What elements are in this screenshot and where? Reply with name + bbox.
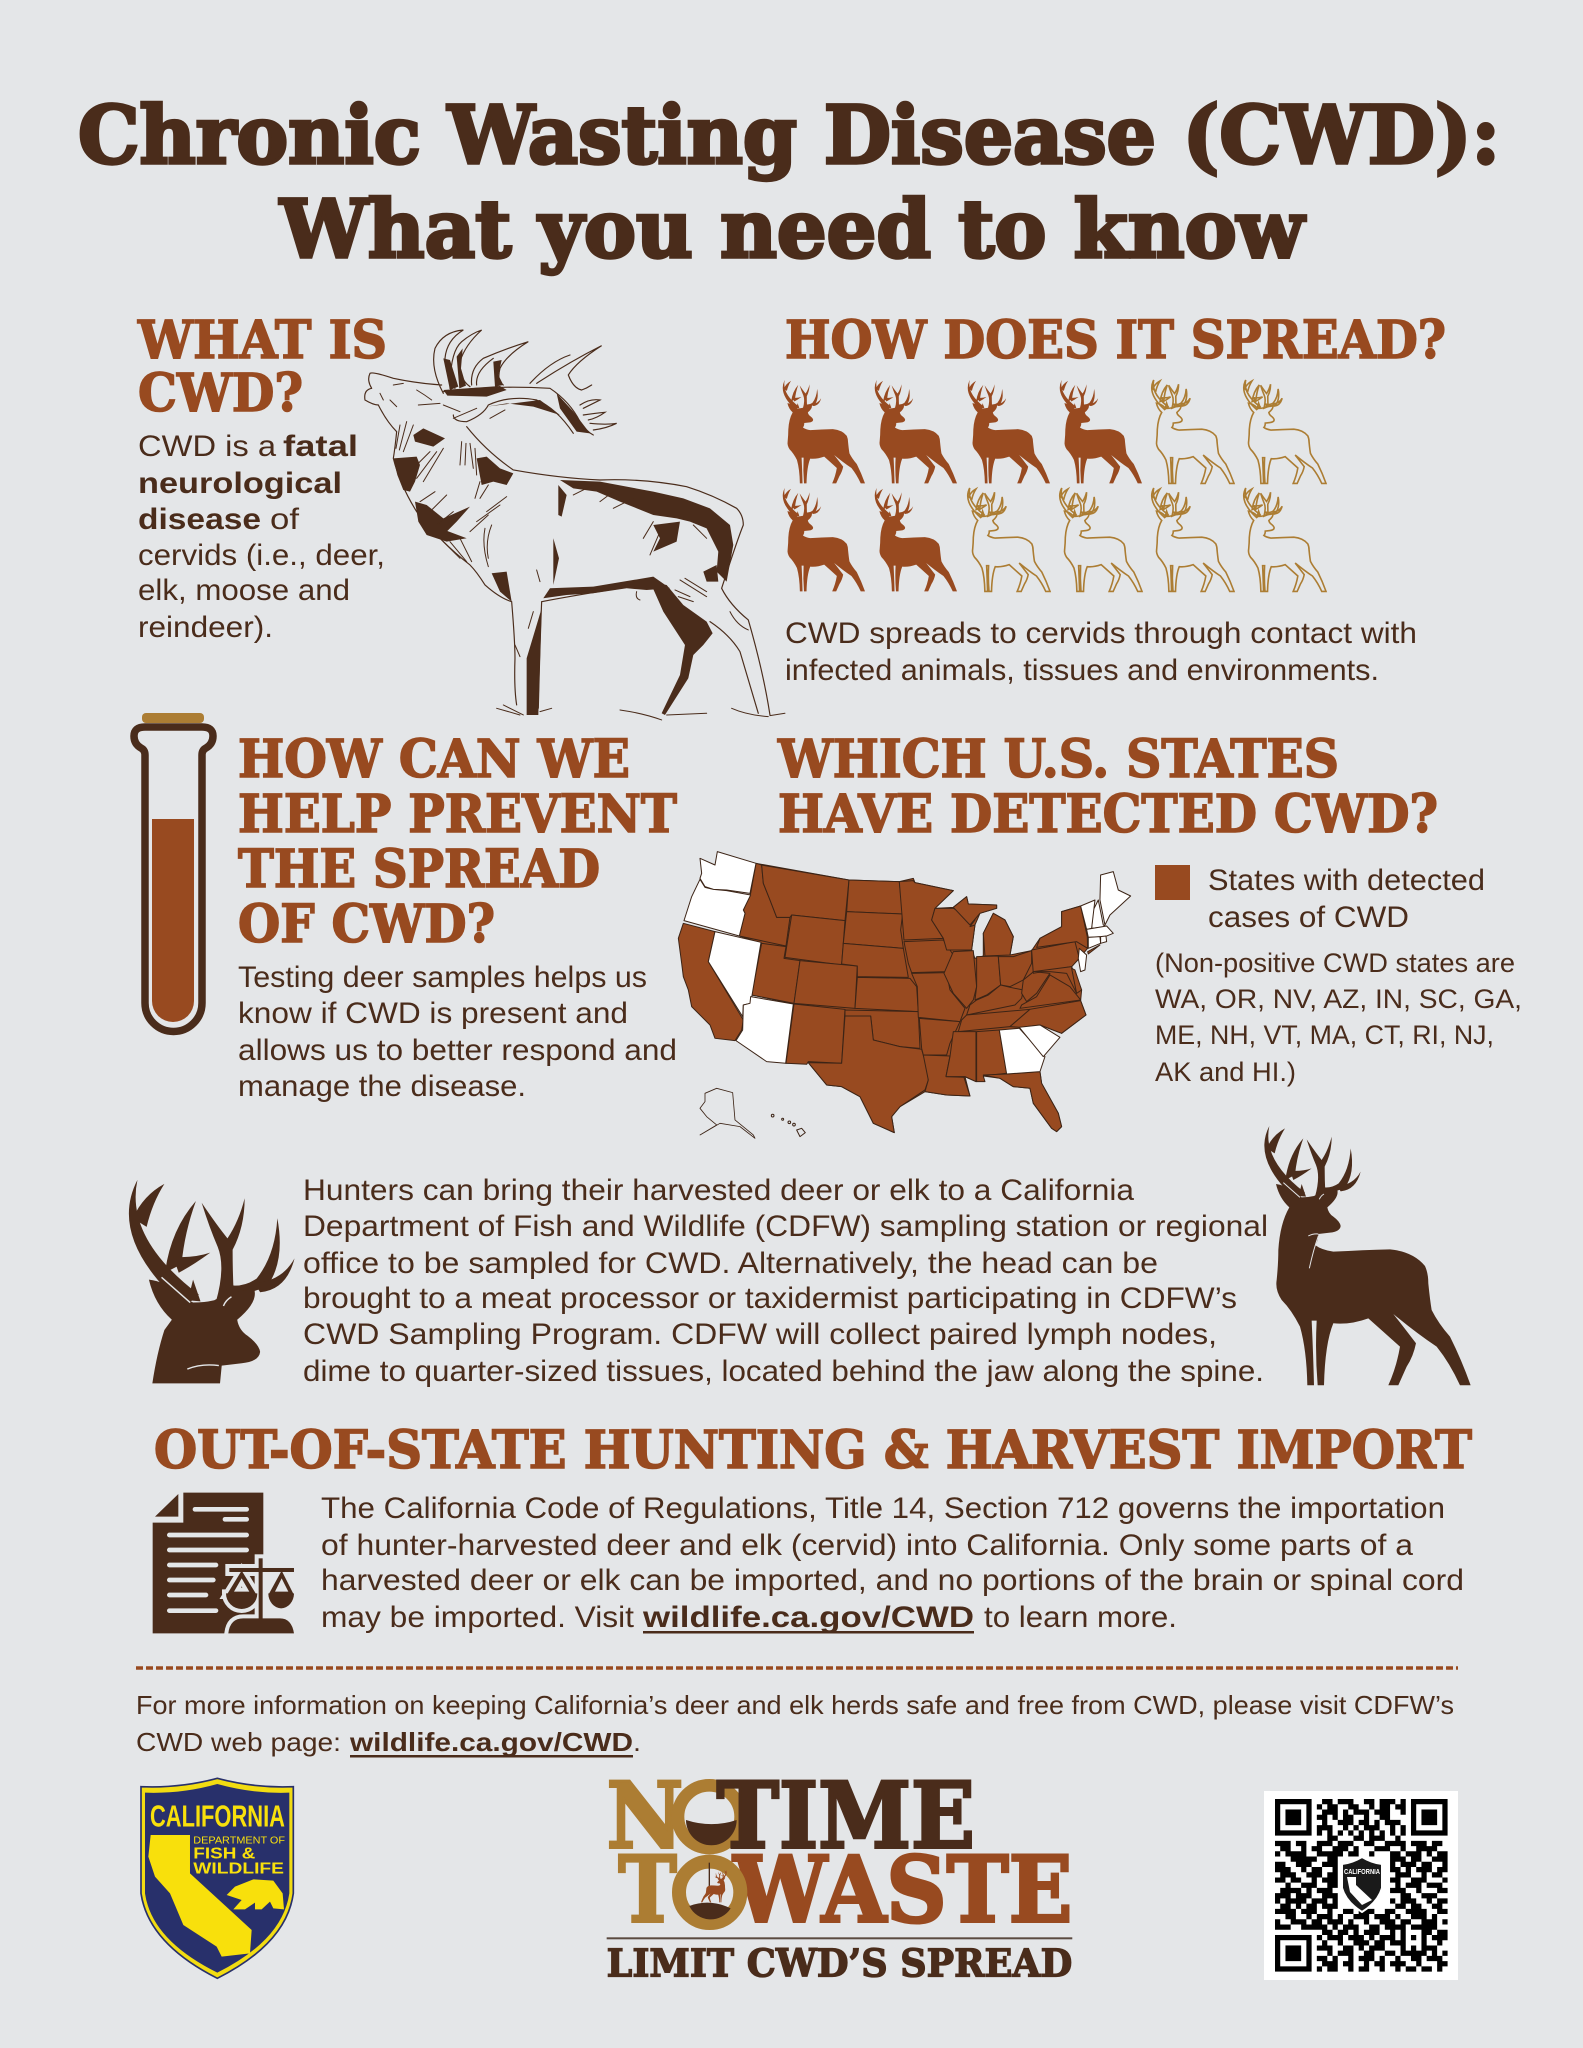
text: CWD definition: elk, moose and	[138, 574, 350, 607]
text: testing samples: know if CWD is present and	[238, 997, 628, 1030]
title: What you need to know	[279, 182, 1306, 276]
heading: out-of-state hunting and harvest import: OUT-OF-STATE HUNTING & HARVEST IMPORT	[154, 1420, 1472, 1481]
text: regulations: The California Code of Regulations, Title 14, Section 712 governs the importation	[321, 1492, 1445, 1525]
heading: how can we help prevent the spread: HELP PREVENT	[238, 784, 677, 845]
text: regulations	[321, 1492, 1464, 1634]
logo: No Time To Waste: WASTE	[732, 1838, 1072, 1944]
text: CWD definition: cervids (i.e., deer,	[138, 539, 385, 572]
text: testing samples: manage the disease.	[238, 1070, 526, 1103]
text: non-positive states: (Non-positive CWD states are	[1155, 948, 1515, 978]
icon: deer head	[129, 1180, 295, 1383]
logo: CDFW shield	[141, 1778, 293, 1978]
heading: which U.S. states: WHICH U.S. STATES	[777, 729, 1339, 790]
text: more information: wildlife.ca.gov/CWD	[349, 1727, 633, 1757]
map: US states with detected CWD	[678, 852, 1131, 1138]
heading: which U.S. states	[777, 729, 1438, 845]
panel: which states	[678, 729, 1522, 1138]
logo: No Time To Waste: TIME	[717, 1763, 975, 1869]
text: CWD definition: CWD is a	[138, 430, 276, 463]
heading: how can we help prevent the spread: THE SPREAD	[238, 839, 600, 900]
logo: CDFW shield: DEPARTMENT OF	[193, 1835, 285, 1846]
text: more information: For more information on keeping California’s deer and elk herds safe and free from CWD, please visit CDFW’s	[136, 1690, 1454, 1720]
text: CWD definition: disease	[138, 503, 261, 536]
text: regulations: harvested deer or elk can be imported, and no portions of the brain or spinal cord	[321, 1564, 1464, 1597]
icon: standing deer	[1264, 1126, 1471, 1385]
logo: CDFW shield: CALIFORNIA	[150, 1800, 285, 1834]
logo: No Time To Waste	[607, 1763, 1072, 1986]
logo: No Time To Waste: LIMIT CWD’S SPREAD	[607, 1941, 1072, 1986]
text: regulations: wildlife.ca.gov/CWD	[642, 1601, 974, 1634]
text: non-positive states: WA, OR, NV, AZ, IN, SC, GA,	[1155, 984, 1522, 1014]
text: CWD definition: of	[270, 503, 300, 536]
heading: how can we help prevent the spread: OF CWD?	[238, 894, 495, 955]
panel: hunter sampling	[129, 1126, 1471, 1388]
text: hunters sampling	[303, 1174, 1268, 1388]
QR code	[1264, 1791, 1458, 1980]
text: how CWD spreads	[785, 617, 1417, 687]
text: hunters sampling: dime to quarter-sized tissues, located behind the jaw along the spine.	[303, 1355, 1264, 1388]
text: more information: CWD web page:	[136, 1727, 341, 1757]
logo: No Time To Waste: T	[618, 1838, 677, 1944]
text: non-positive states: ME, NH, VT, MA, CT, RI, NJ,	[1155, 1020, 1494, 1050]
text: CWD definition: neurological	[138, 467, 342, 500]
heading: what is CWD: CWD?	[138, 363, 303, 424]
title: Chronic Wasting Disease (CWD):	[78, 88, 1500, 182]
text: hunters sampling: office to be sampled for CWD. Alternatively, the head can be	[303, 1247, 1158, 1280]
text: hunters sampling: brought to a meat processor or taxidermist participating in CDFW’s	[303, 1282, 1237, 1315]
logo: CDFW shield: WILDLIFE	[193, 1860, 284, 1877]
legend: States with detected	[1208, 864, 1485, 897]
heading: how can we help prevent the spread: HOW CAN WE	[238, 729, 630, 790]
text: testing samples: Testing deer samples helps us	[238, 961, 647, 994]
text: more information	[136, 1690, 1454, 1758]
QR code: CALIFORNIA	[1344, 1869, 1380, 1876]
heading: which U.S. states: HAVE DETECTED CWD?	[778, 784, 1438, 845]
text: more information: .	[633, 1727, 641, 1757]
icon: test tube	[134, 713, 213, 1032]
text: non-positive states	[1155, 948, 1522, 1087]
text: non-positive states: AK and HI.)	[1155, 1057, 1296, 1087]
text: hunters sampling: Department of Fish and Wildlife (CDFW) sampling station or regional	[303, 1210, 1268, 1243]
panel: what is CWD	[137, 310, 785, 720]
heading: what is CWD	[137, 310, 387, 424]
pictogram: infected and healthy deer	[783, 380, 1326, 591]
heading: how does it spread: HOW DOES IT SPREAD?	[785, 310, 1446, 371]
panel: how does it spread	[783, 310, 1446, 687]
logo: No Time To Waste: N	[607, 1763, 683, 1869]
legend	[1155, 864, 1485, 934]
panel: how can we help prevent	[134, 713, 677, 1103]
text: hunters sampling: CWD Sampling Program. CDFW will collect paired lymph nodes,	[303, 1318, 1217, 1351]
text: how CWD spreads: infected animals, tissues and environments.	[785, 654, 1379, 687]
logo: CDFW shield: FISH &	[193, 1845, 255, 1862]
text: CWD definition: reindeer).	[138, 611, 273, 644]
text: hunters sampling: Hunters can bring their harvested deer or elk to a California	[303, 1174, 1134, 1207]
text: regulations: may be imported. Visit	[321, 1601, 635, 1634]
icon: document with scales	[153, 1493, 294, 1633]
text: regulations: of hunter-harvested deer and elk (cervid) into California. Only some parts of a	[321, 1529, 1413, 1562]
panel: out-of-state import	[153, 1420, 1472, 1634]
heading: what is CWD: WHAT IS	[137, 310, 387, 371]
text: CWD definition	[138, 430, 385, 644]
text: testing samples	[238, 961, 677, 1103]
title	[78, 88, 1500, 276]
heading: how can we help prevent the spread	[238, 729, 677, 955]
illustration: elk sketch	[365, 330, 785, 720]
text: testing samples: allows us to better respond and	[238, 1034, 677, 1067]
text: CWD definition: fatal	[283, 430, 358, 463]
text: how CWD spreads: CWD spreads to cervids through contact with	[785, 617, 1417, 650]
legend: cases of CWD	[1208, 901, 1409, 934]
text: regulations: to learn more.	[984, 1601, 1177, 1634]
